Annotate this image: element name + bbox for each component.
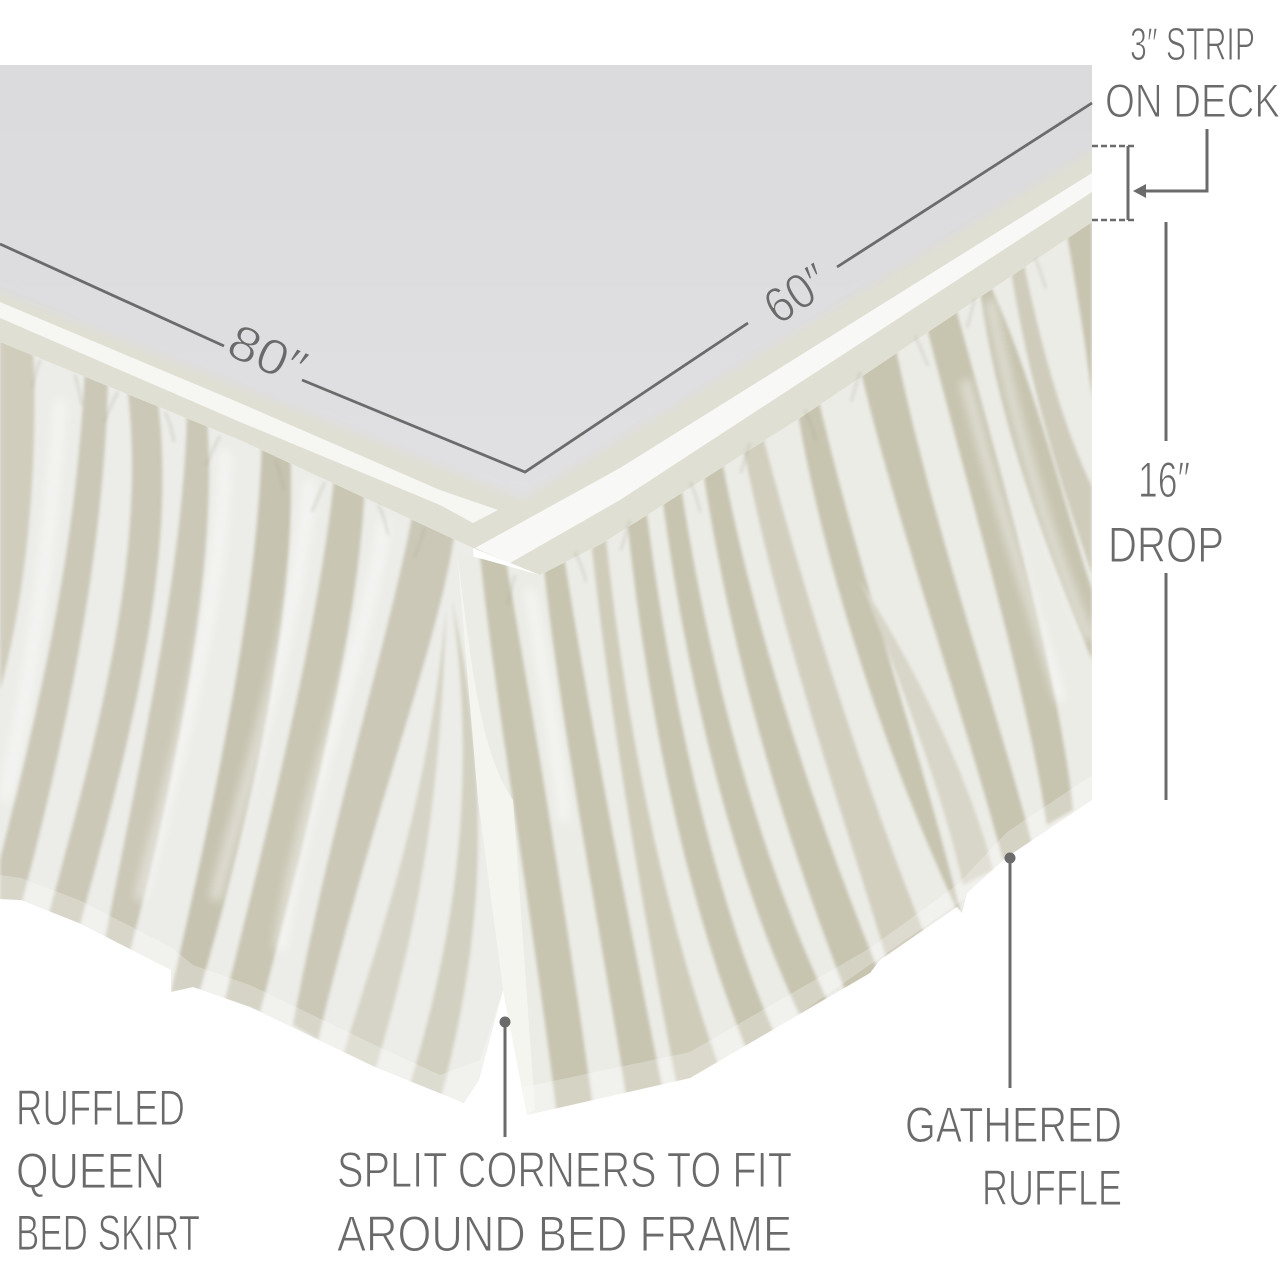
right skirt hem bbox=[552, 789, 1074, 1108]
label: 60 inches: 60″ bbox=[753, 252, 839, 335]
dimension line: 80 inch bbox=[0, 244, 748, 472]
fabric band on deck bbox=[0, 130, 1092, 575]
label: product name: BED SKIRT bbox=[16, 1205, 200, 1261]
label: product name bbox=[16, 1080, 200, 1261]
callout: gathered ruffle bbox=[905, 852, 1122, 1216]
left skirt hem bbox=[0, 875, 448, 1094]
dimension line: 60 inch bbox=[753, 103, 1092, 335]
gathered seam folds bbox=[32, 258, 1046, 605]
right skirt panel bbox=[450, 220, 1100, 1120]
label: product name: QUEEN bbox=[16, 1143, 165, 1199]
white stripe left bbox=[0, 302, 498, 523]
split corner hem strip bbox=[458, 564, 533, 1088]
label: 16 inch drop: 16″ bbox=[1138, 452, 1190, 508]
callout: split corners: SPLIT CORNERS TO FIT bbox=[337, 1142, 792, 1198]
label: 3 inch strip on deck bbox=[1105, 18, 1280, 127]
callout: split corners bbox=[337, 1016, 792, 1262]
left skirt panel bbox=[0, 342, 503, 1103]
callout: gathered ruffle: GATHERED bbox=[905, 1097, 1122, 1153]
callout: split corners: AROUND BED FRAME bbox=[337, 1206, 792, 1262]
white stripe right bbox=[475, 173, 1092, 563]
strip bracket and arrow bbox=[1092, 129, 1207, 220]
label: 80 inches: 80″ bbox=[220, 313, 315, 397]
deck platform bbox=[0, 45, 1112, 500]
drop dimension: DROP bbox=[1108, 517, 1224, 573]
drop dimension bbox=[1108, 222, 1224, 800]
bed skirt photo bbox=[0, 45, 1112, 1120]
callout: gathered ruffle: RUFFLE bbox=[982, 1160, 1122, 1216]
label: product name: RUFFLED bbox=[16, 1080, 185, 1136]
